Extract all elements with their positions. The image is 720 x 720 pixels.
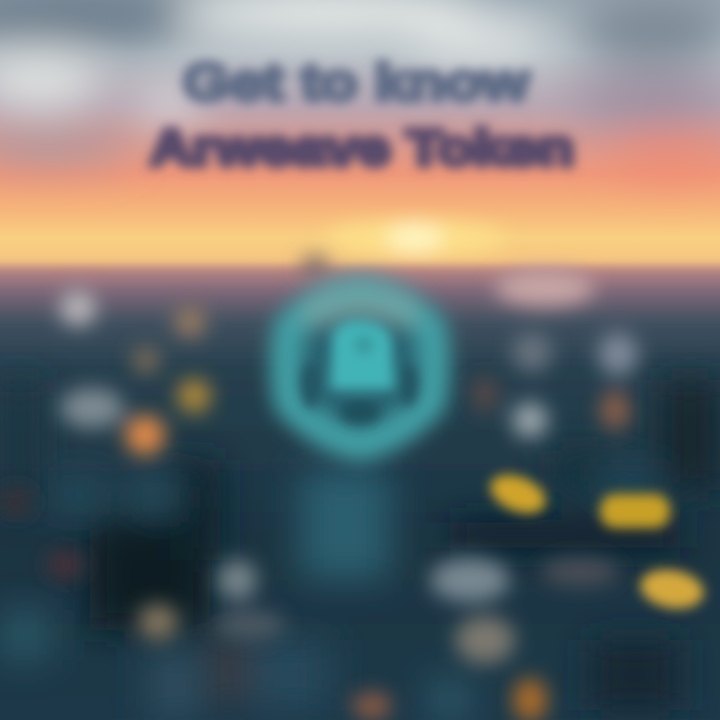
icon center lock	[301, 320, 418, 424]
title line 2: Arweave Token	[150, 120, 574, 176]
title line 1: Get to know	[183, 54, 530, 112]
yellow pill: left	[485, 467, 551, 521]
blurred city skyline	[0, 266, 720, 720]
title	[150, 54, 574, 176]
icon ring	[285, 285, 435, 446]
yellow pill: middle	[600, 494, 670, 528]
sunset sky background	[0, 0, 720, 290]
yellow pill: right	[637, 565, 707, 613]
yellow blurred labels on right	[485, 467, 707, 613]
teal hexagon token icon	[285, 285, 435, 446]
blurred city lights	[0, 256, 638, 720]
